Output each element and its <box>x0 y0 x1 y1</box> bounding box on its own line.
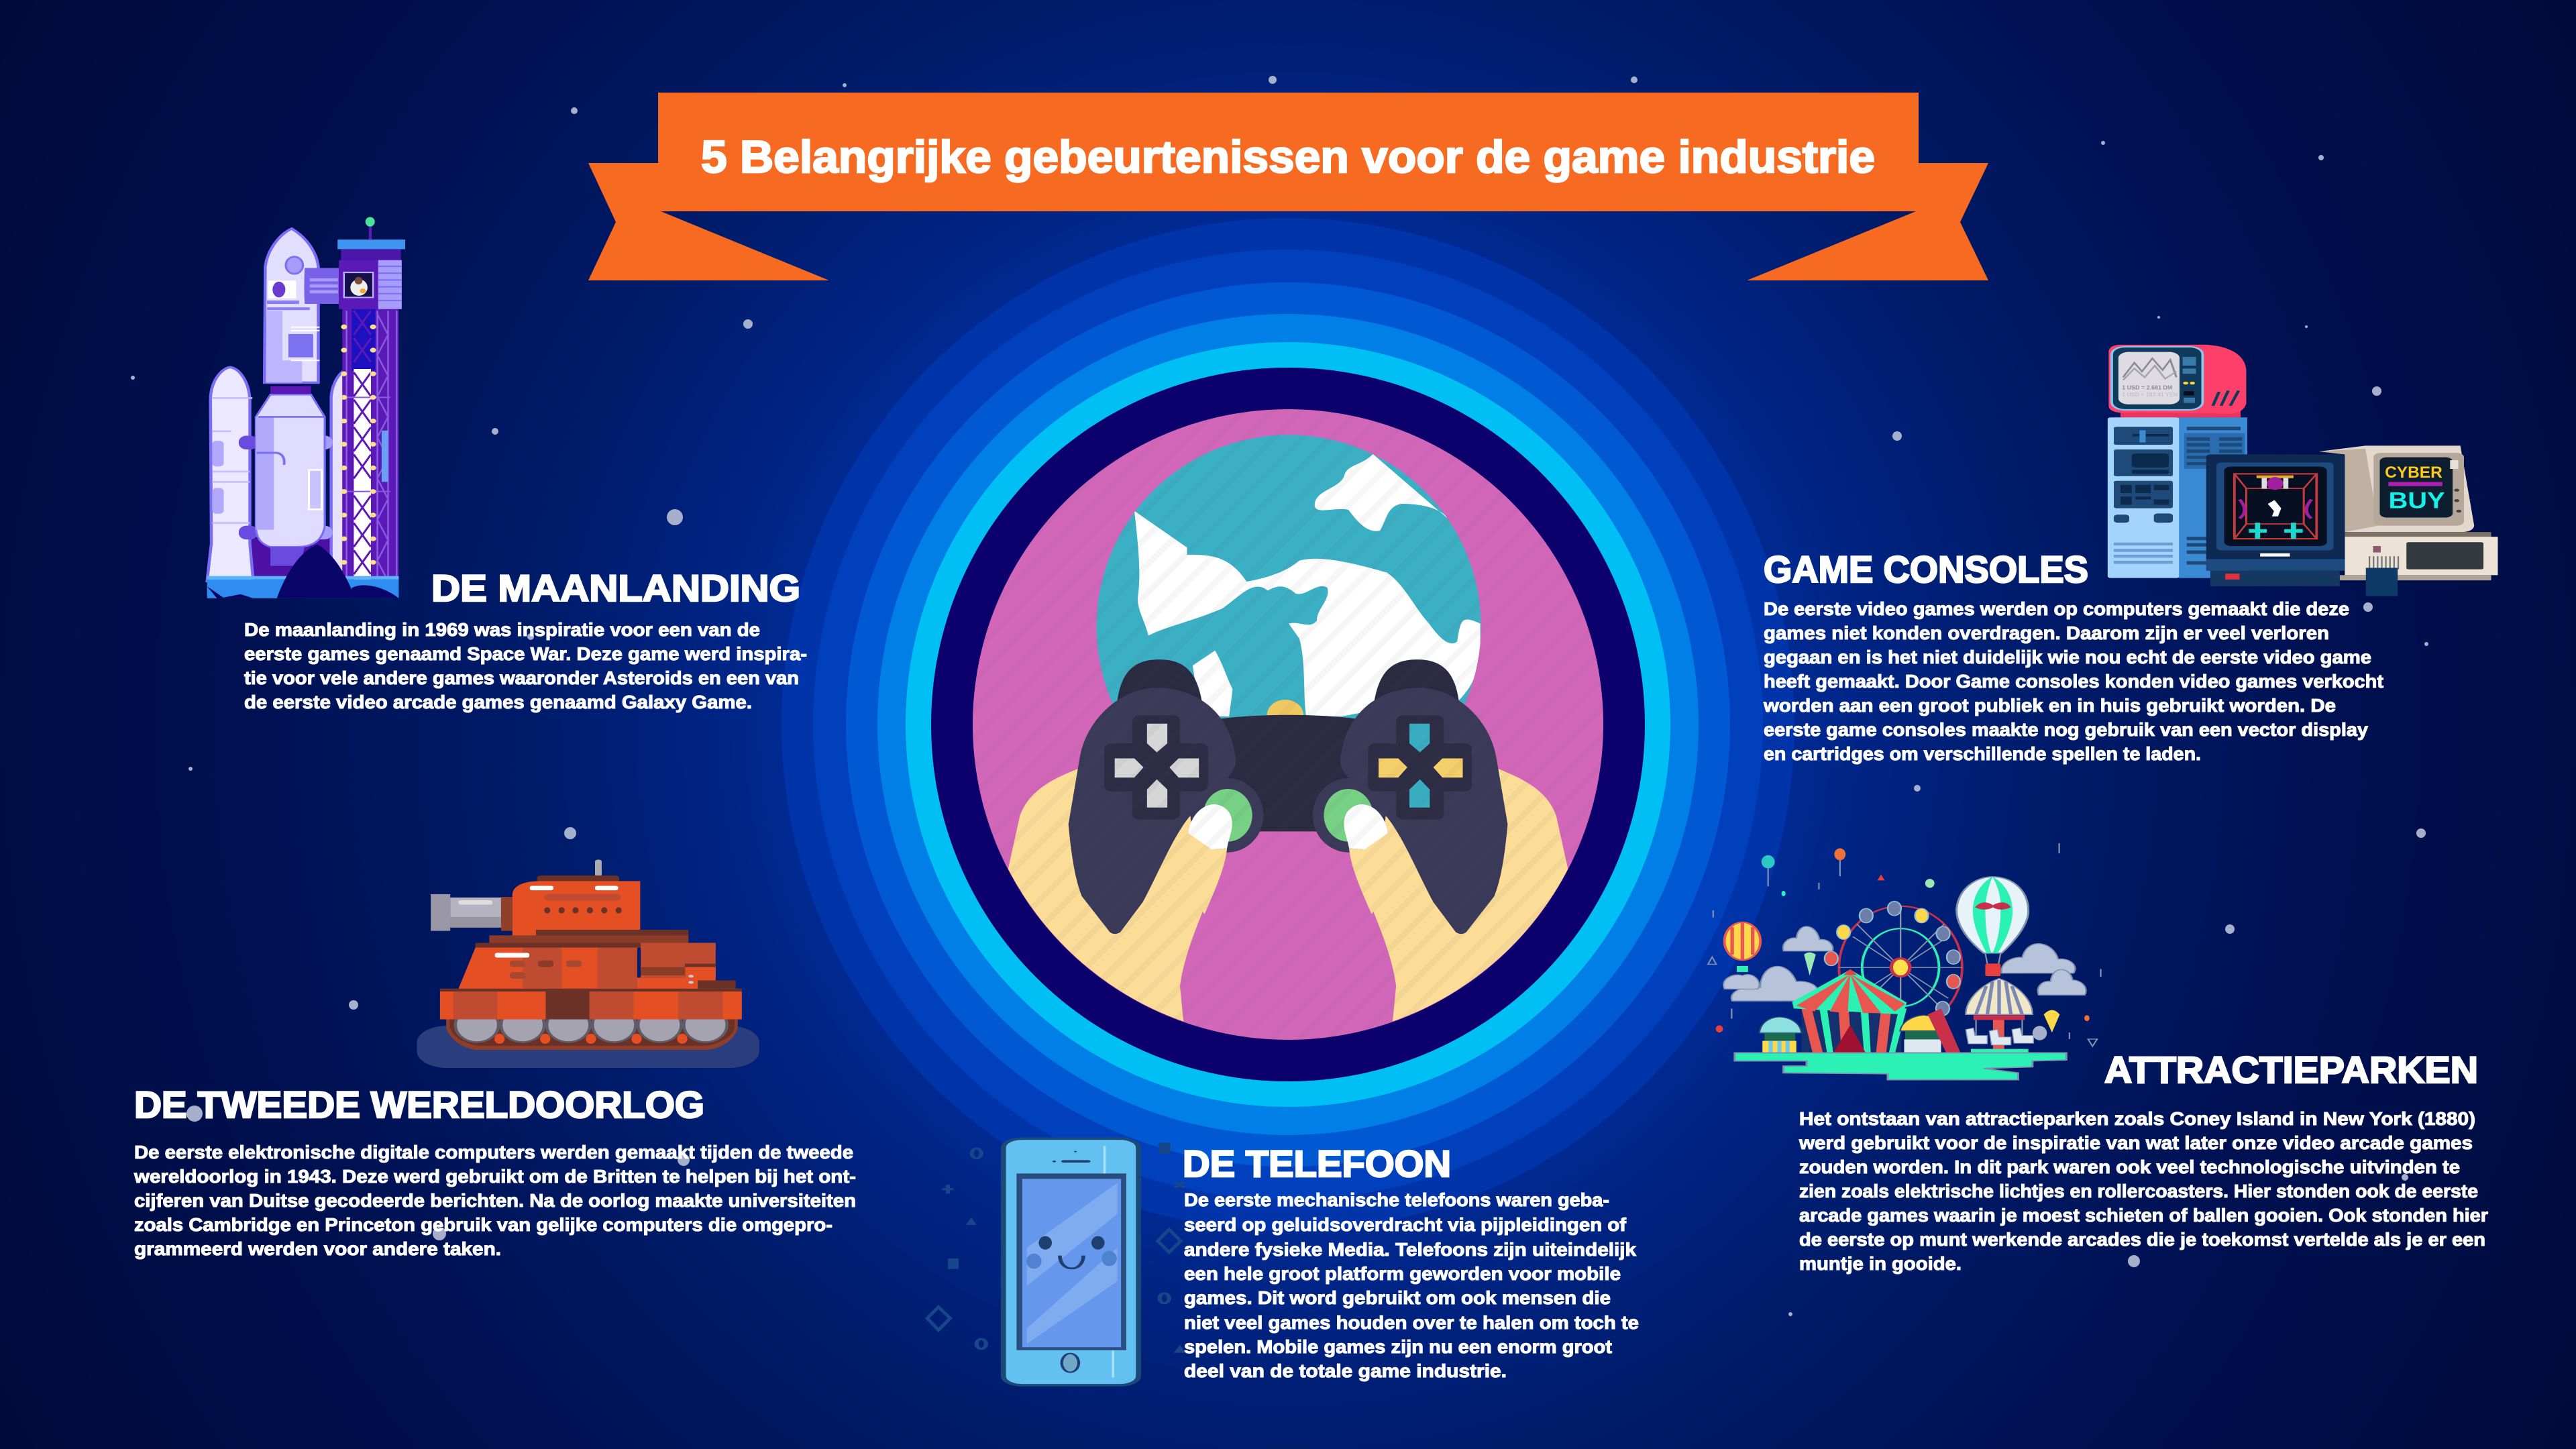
body: de telefoon <box>1184 1189 1639 1381</box>
heading: de maanlanding: DE MAANLANDING <box>431 567 800 609</box>
ground <box>1735 1053 2066 1080</box>
icon: retro computers and consoles <box>2108 345 2498 596</box>
hands <box>1008 769 1568 1021</box>
panel: de maanlanding <box>244 567 807 712</box>
body: game consoles: games niet konden overdragen. Daarom zijn er veel verloren <box>1764 623 2329 643</box>
body: game consoles: gegaan en is het niet duidelijk wie nou echt de eerste video game <box>1764 647 2371 667</box>
panel: game consoles <box>1763 548 2383 764</box>
body: game consoles <box>1763 598 2383 764</box>
diagonal stripes overlay <box>973 409 1603 1040</box>
body: de maanlanding: eerste games genaamd Space War. Deze game werd inspira- <box>244 643 807 664</box>
icon: tank <box>417 860 759 1068</box>
heading: game consoles: GAME CONSOLES <box>1764 548 2088 590</box>
banner ribbon <box>588 93 1988 280</box>
panel: de tweede wereldoorlog <box>133 1083 856 1259</box>
small stands <box>1760 1008 1961 1053</box>
body: de maanlanding <box>244 619 807 712</box>
body: attractieparken: arcade games waarin je moest schieten of ballen gooien. Ook stonden hier <box>1799 1205 2488 1226</box>
body: de tweede wereldoorlog: zoals Cambridge en Princeton gebruik van gelijke computers die omgepro- <box>134 1214 833 1235</box>
launch tower <box>337 217 405 583</box>
blue tower <box>2108 417 2247 578</box>
body: de tweede wereldoorlog <box>133 1142 856 1259</box>
body: attractieparken: Het ontstaan van attractieparken zoals Coney Island in New York (1880) <box>1799 1108 2475 1129</box>
beige computer: BUY <box>2388 488 2445 513</box>
circus tent <box>1792 969 1907 1053</box>
body: de telefoon: andere fysieke Media. Telefoons zijn uiteindelijk <box>1184 1239 1636 1260</box>
ferris wheel <box>1825 902 1962 1030</box>
body: de telefoon: een hele groot platform geworden voor mobile <box>1184 1263 1621 1284</box>
body: de tweede wereldoorlog: grammeerd werden voor andere taken. <box>134 1238 501 1259</box>
floating balloons <box>1708 843 2101 1046</box>
carousel <box>1966 979 2047 1053</box>
body: de tweede wereldoorlog: wereldoorlog in 1943. Deze werd gebruikt om de Britten te helpen bij het ont- <box>133 1166 856 1187</box>
body: game consoles: eerste game consoles maakte nog gebruik van een vector display <box>1764 719 2368 740</box>
right buttons <box>1368 715 1472 820</box>
body: game consoles: heeft gemaakt. Door Game consoles konden video games verkocht <box>1764 671 2383 692</box>
left d-pad <box>1104 715 1208 820</box>
arcade cabinet <box>2206 454 2398 596</box>
body: attractieparken <box>1799 1108 2488 1274</box>
body: de telefoon: games. Dit word gebruikt om ook mensen die <box>1184 1287 1611 1308</box>
heading: de tweede wereldoorlog: DE TWEEDE WERELDOORLOG <box>134 1083 704 1126</box>
body: de maanlanding: de eerste video arcade games genaamd Galaxy Game. <box>244 692 752 712</box>
decorative stars <box>131 76 2428 1316</box>
title banner <box>588 93 1988 280</box>
controller <box>1069 659 1507 934</box>
red television: 1 USD = 2.681 DM <box>2122 384 2172 391</box>
body: de telefoon: De eerste mechanische telefoons waren geba- <box>1184 1189 1609 1210</box>
body: de telefoon: seerd op geluidsoverdracht via pijpleidingen of <box>1184 1214 1627 1235</box>
body: attractieparken: zien zoals elektrische lichtjes en rollercoasters. Hier stonden ook de eerste <box>1799 1181 2478 1201</box>
central illustration: globe and game controller <box>1008 435 1568 1052</box>
icon: smiling phone <box>927 1138 1186 1385</box>
body: game consoles: worden aan een groot publiek en in huis gebruikt worden. De <box>1763 695 2336 716</box>
beige computer <box>2319 445 2498 580</box>
body: de telefoon: niet veel games houden over te halen om toch te <box>1184 1312 1639 1333</box>
icon: rocket on launch tower <box>207 217 405 598</box>
body: attractieparken: de eerste op munt werkende arcades die je toekomst vertelde als je er een <box>1799 1229 2485 1250</box>
panel: de telefoon <box>1183 1142 1639 1381</box>
beige computer: CYBER <box>2385 463 2443 482</box>
globe <box>1096 435 1481 719</box>
body: game consoles: De eerste video games werden op computers gemaakt die deze <box>1764 598 2349 619</box>
body: attractieparken: werd gebruikt voor de inspiratie van wat later onze video arcade games <box>1799 1132 2473 1153</box>
body: de tweede wereldoorlog: cijferen van Duitse gecodeerde berichten. Na de oorlog maakte universiteiten <box>134 1190 856 1211</box>
body: attractieparken: muntje in gooide. <box>1799 1253 1962 1274</box>
big balloon <box>1957 877 2029 976</box>
icon: amusement park <box>1708 843 2101 1080</box>
body: de tweede wereldoorlog: De eerste elektronische digitale computers werden gemaakt tijden de tweede <box>134 1142 853 1163</box>
clouds <box>1723 926 2086 1001</box>
title: 5 Belangrijke gebeurtenissen voor de game industrie <box>701 131 1875 182</box>
body: attractieparken: zouden worden. In dit park waren ook veel technologische uitvinden te <box>1799 1157 2460 1177</box>
panel: attractieparken <box>1799 1049 2488 1274</box>
body: game consoles: en cartridges om verschillende spellen te laden. <box>1764 743 2201 764</box>
sun <box>1267 700 1303 731</box>
body: de telefoon: spelen. Mobile games zijn nu een enorm groot <box>1184 1336 1612 1357</box>
concentric rings <box>782 218 1794 1231</box>
heading: de telefoon: DE TELEFOON <box>1183 1142 1451 1185</box>
red television <box>2108 345 2246 418</box>
heading: attractieparken: ATTRACTIEPARKEN <box>2104 1049 2478 1091</box>
small balloon <box>1725 922 1760 972</box>
red television: 1 USD = 193.41 YEN <box>2122 391 2178 398</box>
body: de maanlanding: De maanlanding in 1969 was inspiratie voor een van de <box>244 619 760 640</box>
body: de telefoon: deel van de totale game industrie. <box>1184 1360 1507 1381</box>
body: de maanlanding: tie voor vele andere games waaronder Asteroids en een van <box>244 667 799 688</box>
